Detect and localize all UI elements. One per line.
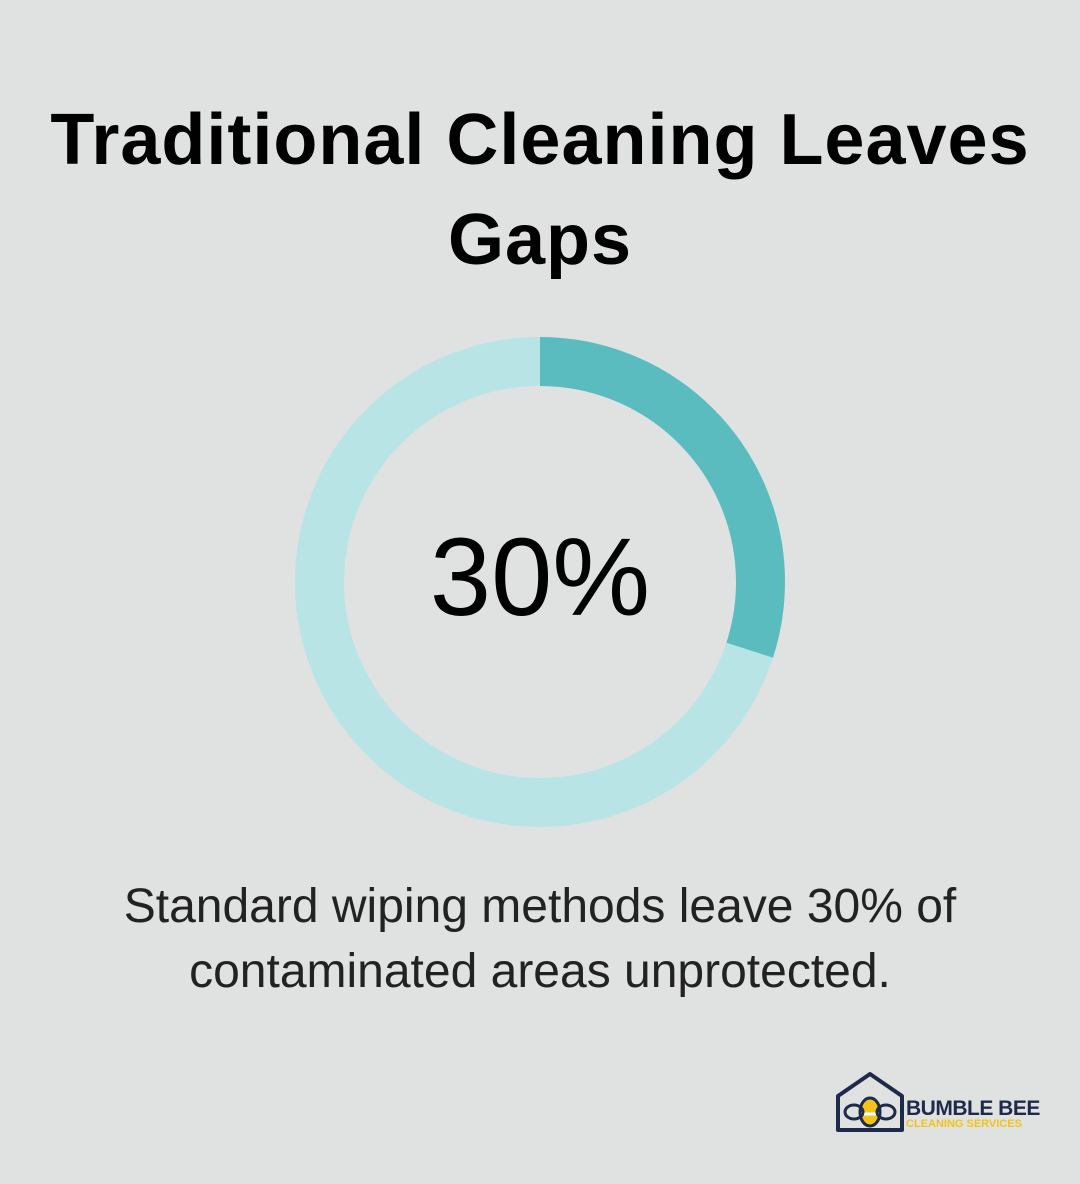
title: Traditional Cleaning Leaves: [50, 100, 1030, 180]
logo text: BUMBLE BEE: [906, 1097, 1040, 1120]
icon: house bee: [836, 1072, 904, 1132]
donut chart: 30%: [430, 516, 650, 639]
title: [50, 100, 1030, 280]
logo: [836, 1072, 1040, 1132]
title: Gaps: [448, 200, 632, 280]
description: contaminated areas unprotected.: [189, 945, 891, 998]
logo: CLEANING SERVICES: [906, 1118, 1022, 1130]
description: Standard wiping methods leave 30% of: [124, 880, 956, 933]
description: [124, 880, 956, 998]
